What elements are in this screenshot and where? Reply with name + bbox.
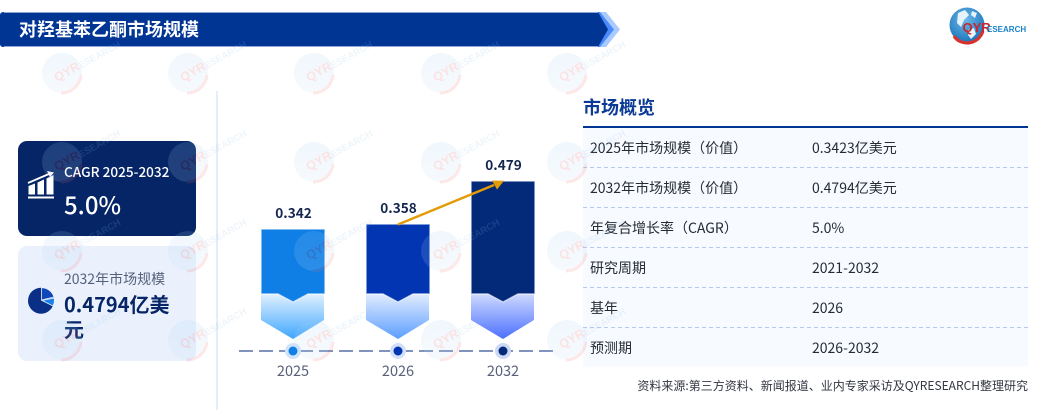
header banner bbox=[0, 12, 620, 47]
watermarks: QYRESEARCH bbox=[557, 37, 628, 85]
value label: 0.358 bbox=[380, 197, 417, 217]
watermarks: QYRESEARCH bbox=[52, 215, 123, 263]
icon: pie chart bbox=[28, 288, 54, 314]
row: base year bbox=[590, 298, 843, 318]
row: forecast period: 2026-2032 bbox=[812, 338, 879, 358]
value: 2032 market size: 元 bbox=[64, 314, 84, 343]
marker bbox=[285, 343, 301, 359]
row: forecast period: 预测期 bbox=[590, 338, 632, 358]
value label: 0.342 bbox=[275, 202, 312, 222]
source note: 资料来源:第三方资料、新闻报道、业内专家采访及QYRESEARCH整理研究 bbox=[637, 377, 1028, 394]
value label: 0.479 bbox=[485, 154, 522, 174]
title: 对羟基苯乙酮市场规模 bbox=[19, 16, 199, 42]
panel: CAGR card bbox=[18, 141, 196, 236]
watermarks: QYRESEARCH bbox=[304, 215, 375, 263]
row: study period bbox=[590, 258, 879, 278]
bar: 2032 bbox=[471, 154, 534, 381]
watermarks: QYRESEARCH bbox=[304, 304, 375, 352]
row: forecast period bbox=[590, 338, 879, 358]
watermarks: QYRESEARCH bbox=[178, 304, 249, 352]
row: base year: 基年 bbox=[590, 298, 618, 318]
row: 2025 market size bbox=[590, 138, 897, 158]
watermarks: QYRESEARCH bbox=[557, 126, 628, 174]
watermarks: QYRESEARCH bbox=[557, 215, 628, 263]
year label: 2026 bbox=[382, 360, 414, 381]
bar: 2025 bbox=[261, 202, 324, 381]
row: CAGR: 5.0% bbox=[812, 218, 844, 238]
marker bbox=[390, 343, 406, 359]
panel: 2032 market size card bbox=[18, 246, 196, 361]
bar: 2026 bbox=[366, 197, 430, 381]
label: 2032 market size: 2032年市场规模 bbox=[64, 269, 165, 289]
divider bbox=[216, 91, 218, 410]
watermarks: QYRESEARCH bbox=[178, 37, 249, 85]
icon: rising bar chart bbox=[28, 171, 54, 198]
year label: 2025 bbox=[277, 360, 309, 381]
watermarks: QYRESEARCH bbox=[557, 304, 628, 352]
row: 2032 market size: 2032年市场规模（价值） bbox=[590, 178, 747, 198]
timeline axis bbox=[239, 350, 557, 352]
row: study period: 研究周期 bbox=[590, 258, 646, 278]
row: 2032 market size: 0.4794亿美元 bbox=[812, 178, 897, 198]
watermarks: QYRESEARCH bbox=[304, 126, 375, 174]
value: 2032 market size: 0.4794亿美 bbox=[64, 289, 170, 318]
heading: 市场概览 bbox=[583, 94, 655, 120]
row: base year: 2026 bbox=[812, 298, 843, 318]
row: 2032 market size bbox=[590, 178, 897, 198]
panel: market overview table bbox=[583, 94, 1028, 366]
watermarks: QYRESEARCH bbox=[431, 126, 502, 174]
bar chart bbox=[239, 154, 557, 381]
watermarks: QYRESEARCH bbox=[52, 126, 123, 174]
watermarks: QYRESEARCH bbox=[52, 304, 123, 352]
marker bbox=[495, 343, 511, 359]
watermarks: QYRESEARCH bbox=[304, 37, 375, 85]
label: CAGR period: CAGR 2025-2032 bbox=[64, 161, 170, 181]
watermarks: QYRESEARCH bbox=[431, 304, 502, 352]
watermarks bbox=[42, 37, 628, 360]
row: study period: 2021-2032 bbox=[812, 258, 879, 278]
arrow: growth trend bbox=[398, 180, 504, 224]
watermarks: QYRESEARCH bbox=[178, 215, 249, 263]
watermarks: QYRESEARCH bbox=[431, 215, 502, 263]
watermarks: QYRESEARCH bbox=[178, 126, 249, 174]
watermarks: QYRESEARCH bbox=[52, 37, 123, 85]
logo: QYResearch: ESEARCH bbox=[987, 25, 1026, 34]
year label: 2032 bbox=[487, 360, 519, 381]
row: CAGR bbox=[590, 218, 844, 238]
value: CAGR: 5.0% bbox=[64, 186, 121, 221]
watermarks: QYRESEARCH bbox=[431, 37, 502, 85]
logo: QYResearch bbox=[950, 8, 1026, 43]
row: CAGR: 年复合增长率（CAGR） bbox=[590, 218, 738, 238]
logo: QYResearch: QYR bbox=[962, 20, 991, 35]
row: 2025 market size: 0.3423亿美元 bbox=[812, 138, 897, 158]
row: 2025 market size: 2025年市场规模（价值） bbox=[590, 138, 747, 158]
